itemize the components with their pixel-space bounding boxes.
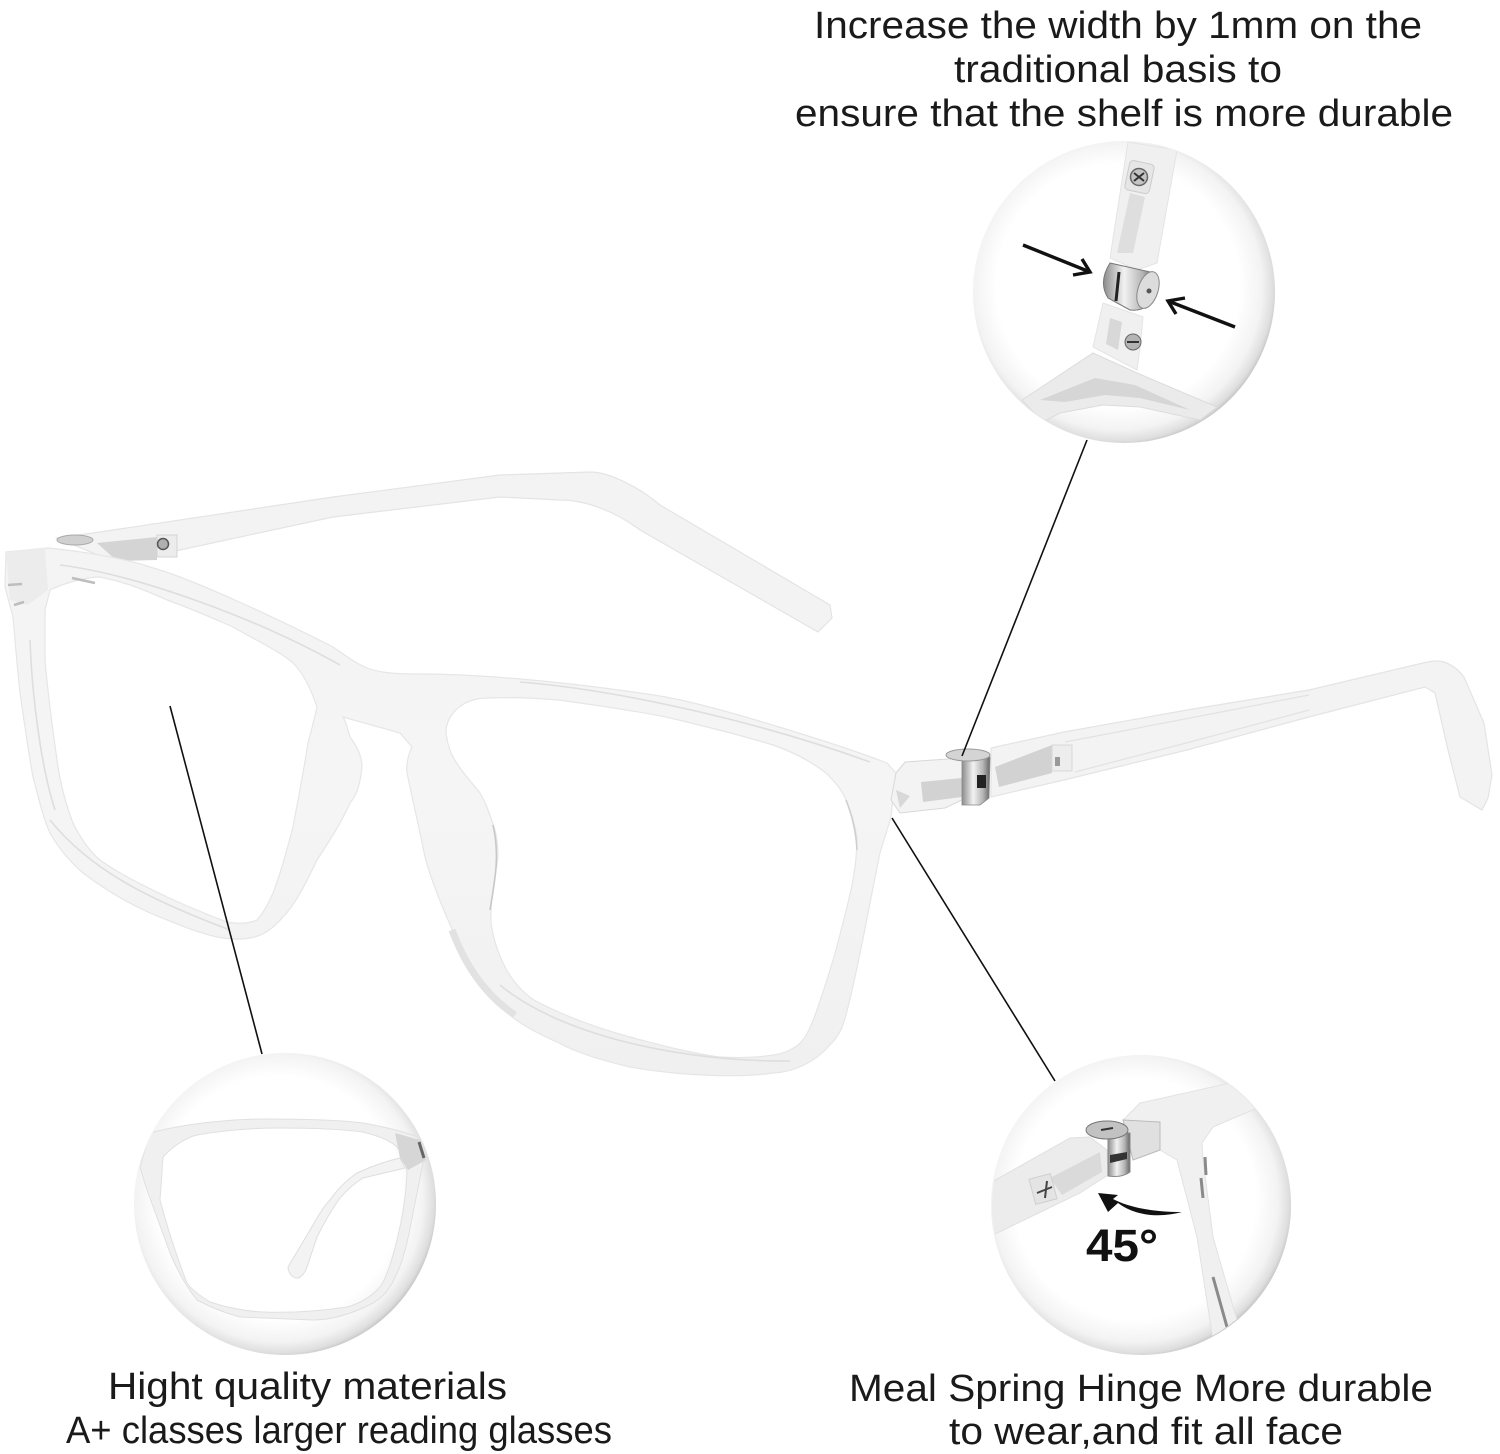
- bottom right caption: [849, 1368, 1433, 1453]
- leader line: spring hinge: [892, 818, 1055, 1081]
- hinge slot: [977, 775, 986, 788]
- far temple metal strip: [97, 537, 157, 561]
- callout circle: shelf width: [973, 141, 1275, 443]
- lower screw: [1125, 334, 1141, 350]
- lower inlay: [1106, 318, 1122, 350]
- hinge screw cap: [946, 749, 990, 761]
- top caption: Increase the width by 1mm on the: [814, 5, 1422, 47]
- near temple metal strip: [995, 745, 1052, 787]
- rim dark lines: [1201, 1157, 1227, 1327]
- callout circle: hinge 45 degrees: [990, 1055, 1291, 1355]
- top caption: ensure that the shelf is more durable: [795, 93, 1453, 135]
- arm inlay: [1050, 1152, 1102, 1195]
- leader line: lens material: [170, 706, 262, 1054]
- rim highlight lines: [30, 565, 870, 1061]
- bottom right caption: Meal Spring Hinge More durable: [849, 1368, 1433, 1410]
- temple arm: [990, 1137, 1108, 1235]
- frame front: [1123, 1083, 1257, 1340]
- curved arrow: [1098, 1193, 1182, 1215]
- top screw: [1124, 160, 1155, 194]
- screw head: [1086, 1121, 1128, 1139]
- metal barrel: [1108, 1133, 1130, 1176]
- far temple arm: [57, 472, 832, 632]
- bottom right caption: to wear,and fit all face: [949, 1411, 1343, 1453]
- corner detail: [1040, 378, 1190, 410]
- inward arrow right: [1168, 298, 1235, 327]
- glasses product photo: [5, 472, 1492, 1076]
- far rivet plate: [157, 535, 177, 557]
- near hinge sparkle: [896, 790, 910, 808]
- lower arm segment: [1093, 303, 1143, 370]
- frame corner: [1022, 353, 1217, 422]
- bottom left caption: A+ classes larger reading glasses: [66, 1410, 612, 1452]
- near hinge block: [891, 758, 970, 813]
- mini frame: [140, 1119, 423, 1320]
- metal hinge barrel: [1103, 263, 1163, 311]
- far rivet screw: [158, 538, 168, 550]
- top caption: traditional basis to: [954, 49, 1282, 91]
- angle label: 45°: [1086, 1220, 1158, 1271]
- near temple rivet plate: [1052, 745, 1072, 771]
- mini temple: [288, 1158, 405, 1278]
- arm screw: [1029, 1174, 1057, 1204]
- near hinge metal plate: [921, 778, 962, 802]
- bottom left caption: [66, 1366, 612, 1452]
- upper arm segment: [1110, 142, 1177, 270]
- bottom left caption: Hight quality materials: [108, 1366, 507, 1408]
- barrel slot: [1110, 1152, 1127, 1163]
- near temple inner lines: [1065, 695, 1309, 772]
- top caption: [795, 5, 1453, 135]
- mini hinge: [395, 1133, 426, 1170]
- left hinge block detail: [6, 548, 48, 605]
- leader line: wider shelf: [962, 440, 1087, 756]
- front frame with lens openings: [5, 548, 896, 1076]
- inward arrow left: [1023, 245, 1090, 275]
- lower rim shading: [452, 930, 515, 1015]
- far hinge cap: [57, 535, 93, 545]
- left block shadows: [8, 578, 95, 605]
- mini hinge dark accent: [419, 1142, 424, 1158]
- callout circle: materials: [134, 1053, 436, 1355]
- upper arm inlay: [1117, 193, 1145, 253]
- hinge box: [1123, 1120, 1160, 1160]
- near hinge barrel: [962, 757, 990, 805]
- near temple arm: [991, 661, 1492, 810]
